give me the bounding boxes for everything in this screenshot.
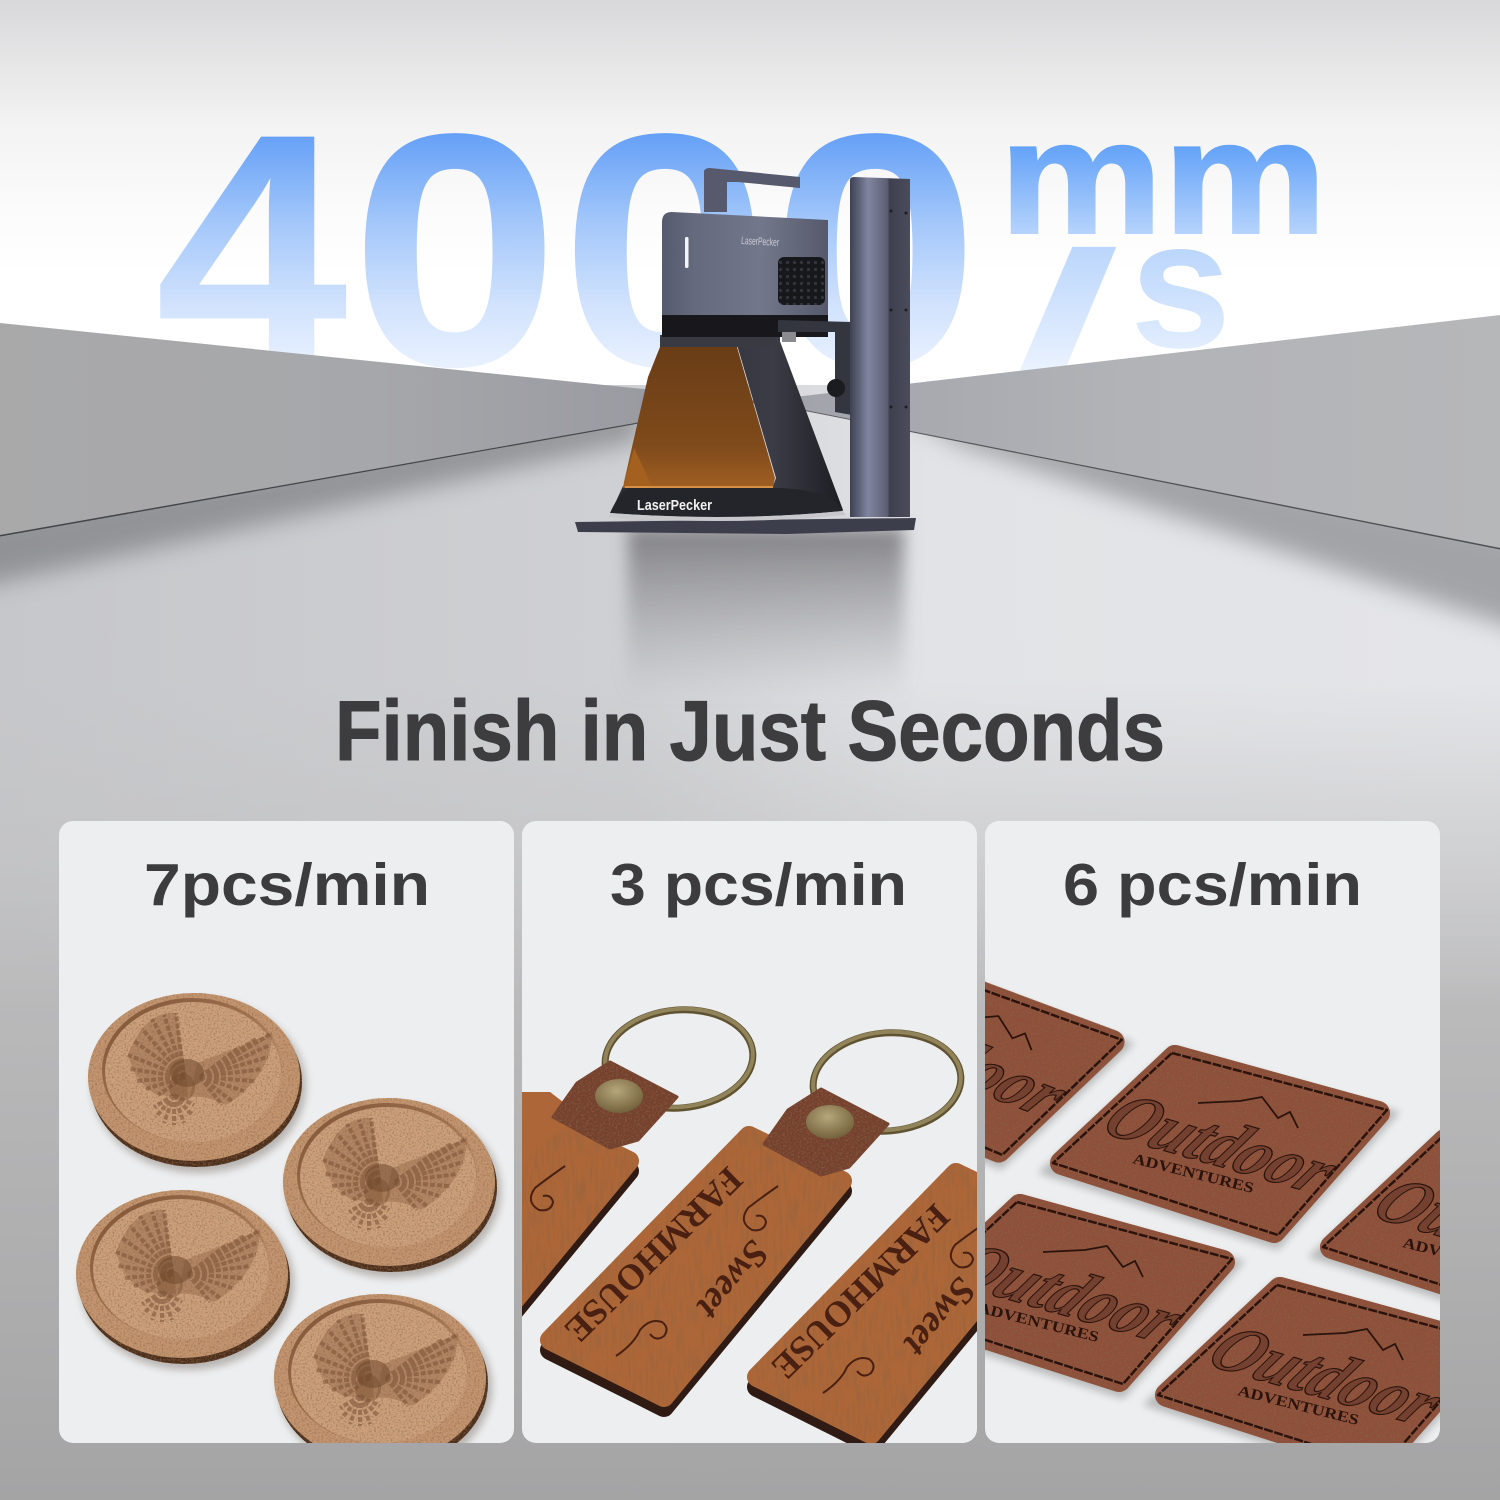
keychain centre ring and strap (764, 1026, 965, 1175)
logo word: Outdoor (1088, 1081, 1355, 1207)
keychain left (522, 1006, 756, 1316)
patch 2: ADVENTURES (1131, 1151, 1255, 1197)
patch 5: ADVENTURES (1236, 1383, 1360, 1429)
bracket and knob (778, 320, 852, 415)
patch 5 (1142, 1277, 1440, 1443)
patch 4 (1308, 1130, 1440, 1304)
right wall (760, 315, 1500, 550)
keychain right: Sweet (895, 1269, 984, 1365)
keychain centre: Sweet (688, 1232, 777, 1328)
patch 3 (985, 1194, 1246, 1402)
black cone stand (612, 336, 843, 510)
keychain centre: FARMHOUSE (557, 1159, 750, 1350)
patch 1 (985, 982, 1135, 1172)
logo word: Outdoor (1193, 1313, 1460, 1439)
big speed number: 4000 mm/s: s (1130, 182, 1231, 386)
base ring with logo: LaserPecker (637, 498, 712, 514)
panel: cork coasters (59, 821, 514, 1474)
laser head housing (662, 212, 828, 315)
keychains (522, 1006, 977, 1443)
keychain right (747, 1163, 977, 1443)
patches (985, 982, 1440, 1443)
base ring with logo (608, 488, 846, 521)
keychain right: FARMHOUSE (764, 1196, 957, 1387)
left wall (0, 323, 760, 536)
big speed number: 4000 mm/s: mm (999, 87, 1327, 268)
panel title: 3 pcs/min: 3 pcs/min (610, 852, 907, 918)
keychain centre (550, 1136, 842, 1407)
patch 3: ADVENTURES (976, 1300, 1100, 1346)
black band (662, 315, 828, 337)
patch 2 (1038, 1048, 1400, 1250)
big speed number: 4000 mm/s: 000 (350, 65, 980, 436)
big speed number: 4000 mm/s: / (1015, 217, 1120, 407)
laser head housing: LaserPecker (741, 235, 780, 249)
big speed number: 4000 mm/s: 4 (155, 65, 350, 436)
coasters (76, 993, 501, 1474)
panel title: 6 pcs/min: 6 pcs/min (1063, 852, 1362, 918)
laser engraver machine (575, 168, 916, 534)
coaster 2 (283, 1098, 501, 1278)
panel title: 7pcs/min: 7pcs/min (144, 852, 430, 918)
column (850, 177, 910, 517)
coaster 3 (76, 1190, 294, 1370)
panel: wooden keychains (522, 821, 977, 1443)
amber cover (623, 347, 775, 488)
big speed number: 4000 mm/s (155, 65, 1327, 436)
coaster 4 (274, 1294, 496, 1443)
coaster 1 (88, 993, 306, 1173)
heading: Finish in Just Seconds (335, 684, 1165, 779)
logo word: Outdoor (821, 989, 1087, 1129)
floor shadows (0, 405, 1500, 698)
base plate (575, 518, 916, 534)
logo word: Outdoor (933, 1230, 1200, 1356)
handle (704, 168, 800, 212)
panel: leather patches (985, 821, 1440, 1443)
